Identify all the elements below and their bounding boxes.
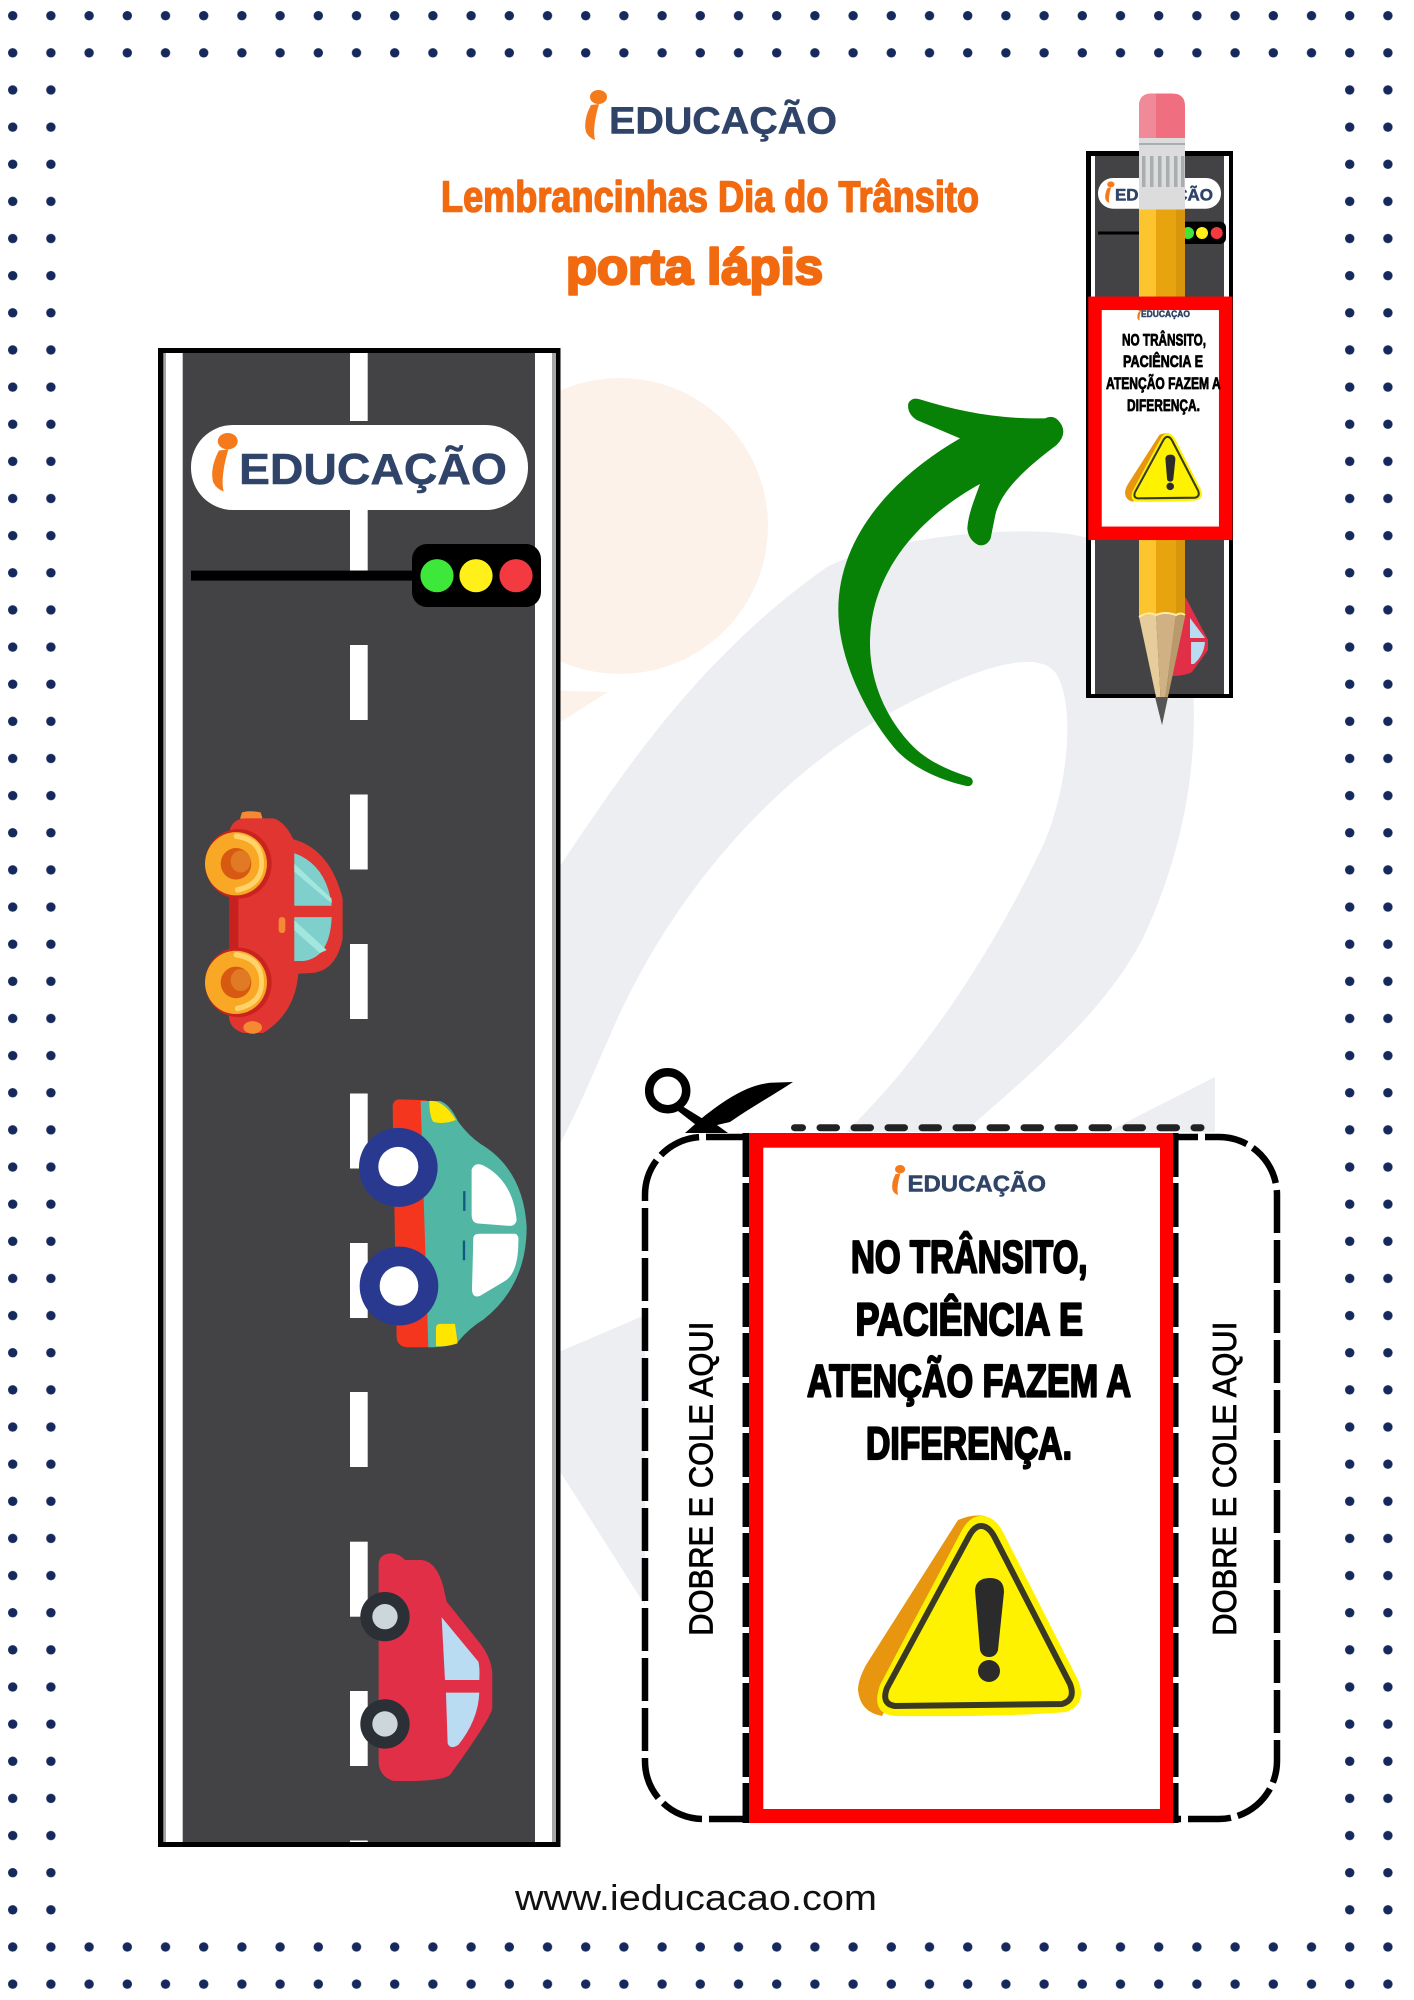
panel logo: EDUCAÇÃO	[908, 1170, 1046, 1197]
traffic light	[191, 544, 541, 607]
icon: mini warning triangle	[1125, 433, 1202, 502]
mini message card	[1095, 303, 1226, 533]
red message frame	[749, 1133, 1173, 1823]
message text: PACIÊNCIA E	[856, 1294, 1083, 1345]
message text	[807, 1232, 1131, 1469]
logo wordmark: EDUCAÇÃO	[609, 99, 837, 143]
header logo	[585, 90, 837, 143]
subtitle: porta lápis	[566, 239, 823, 295]
mini message card: DIFERENÇA.	[1127, 396, 1200, 415]
top cut line	[794, 1124, 1201, 1131]
arrow: green curved arrow	[838, 399, 1063, 786]
icon: teal car	[359, 1099, 527, 1347]
left dashed flap outline	[645, 1137, 749, 1819]
mini road	[1086, 151, 1233, 698]
icon: warning triangle	[858, 1516, 1081, 1716]
panel: finished pencil holder example	[1086, 94, 1233, 725]
message text: DIFERENÇA.	[866, 1418, 1072, 1469]
mini message card: NO TRÂNSITO,	[1122, 331, 1206, 350]
road logo pill	[191, 425, 528, 510]
footer url: www.ieducacao.com	[514, 1877, 877, 1918]
icon: red car with orange wheels	[205, 811, 343, 1034]
icon: crimson car	[360, 1553, 492, 1781]
icon: scissors	[649, 1072, 793, 1133]
left fold line	[743, 1133, 749, 1823]
white card behind template	[645, 1137, 1277, 1819]
mini message card: PACIÊNCIA E	[1123, 352, 1203, 371]
right flap label: DOBRE E COLE AQUI	[1206, 1322, 1243, 1636]
message text: NO TRÂNSITO,	[851, 1232, 1088, 1283]
mini logo pill	[1098, 178, 1221, 209]
icon: pencil	[1139, 94, 1185, 725]
right dashed flap outline	[1173, 1137, 1277, 1819]
mini car	[1170, 596, 1208, 676]
centre road dashes	[350, 353, 368, 1842]
left flap label: DOBRE E COLE AQUI	[682, 1322, 719, 1636]
road logo pill: EDUCAÇÃO	[239, 444, 507, 494]
logo i mark	[585, 90, 607, 140]
mini traffic light	[1098, 222, 1226, 244]
message text: ATENÇÃO FAZEM A	[807, 1356, 1131, 1407]
title: Lembrancinhas Dia do Trânsito	[441, 172, 979, 222]
mini message card: EDUCAÇÃO	[1141, 309, 1190, 320]
right fold line	[1173, 1133, 1179, 1823]
mini message card: ATENÇÃO FAZEM A	[1106, 373, 1221, 393]
panel: cut-out template	[645, 1072, 1277, 1823]
mini logo pill: EDUCAÇÃO	[1115, 185, 1213, 205]
background watermark	[472, 378, 1215, 1613]
panel: road strip	[158, 348, 560, 1847]
